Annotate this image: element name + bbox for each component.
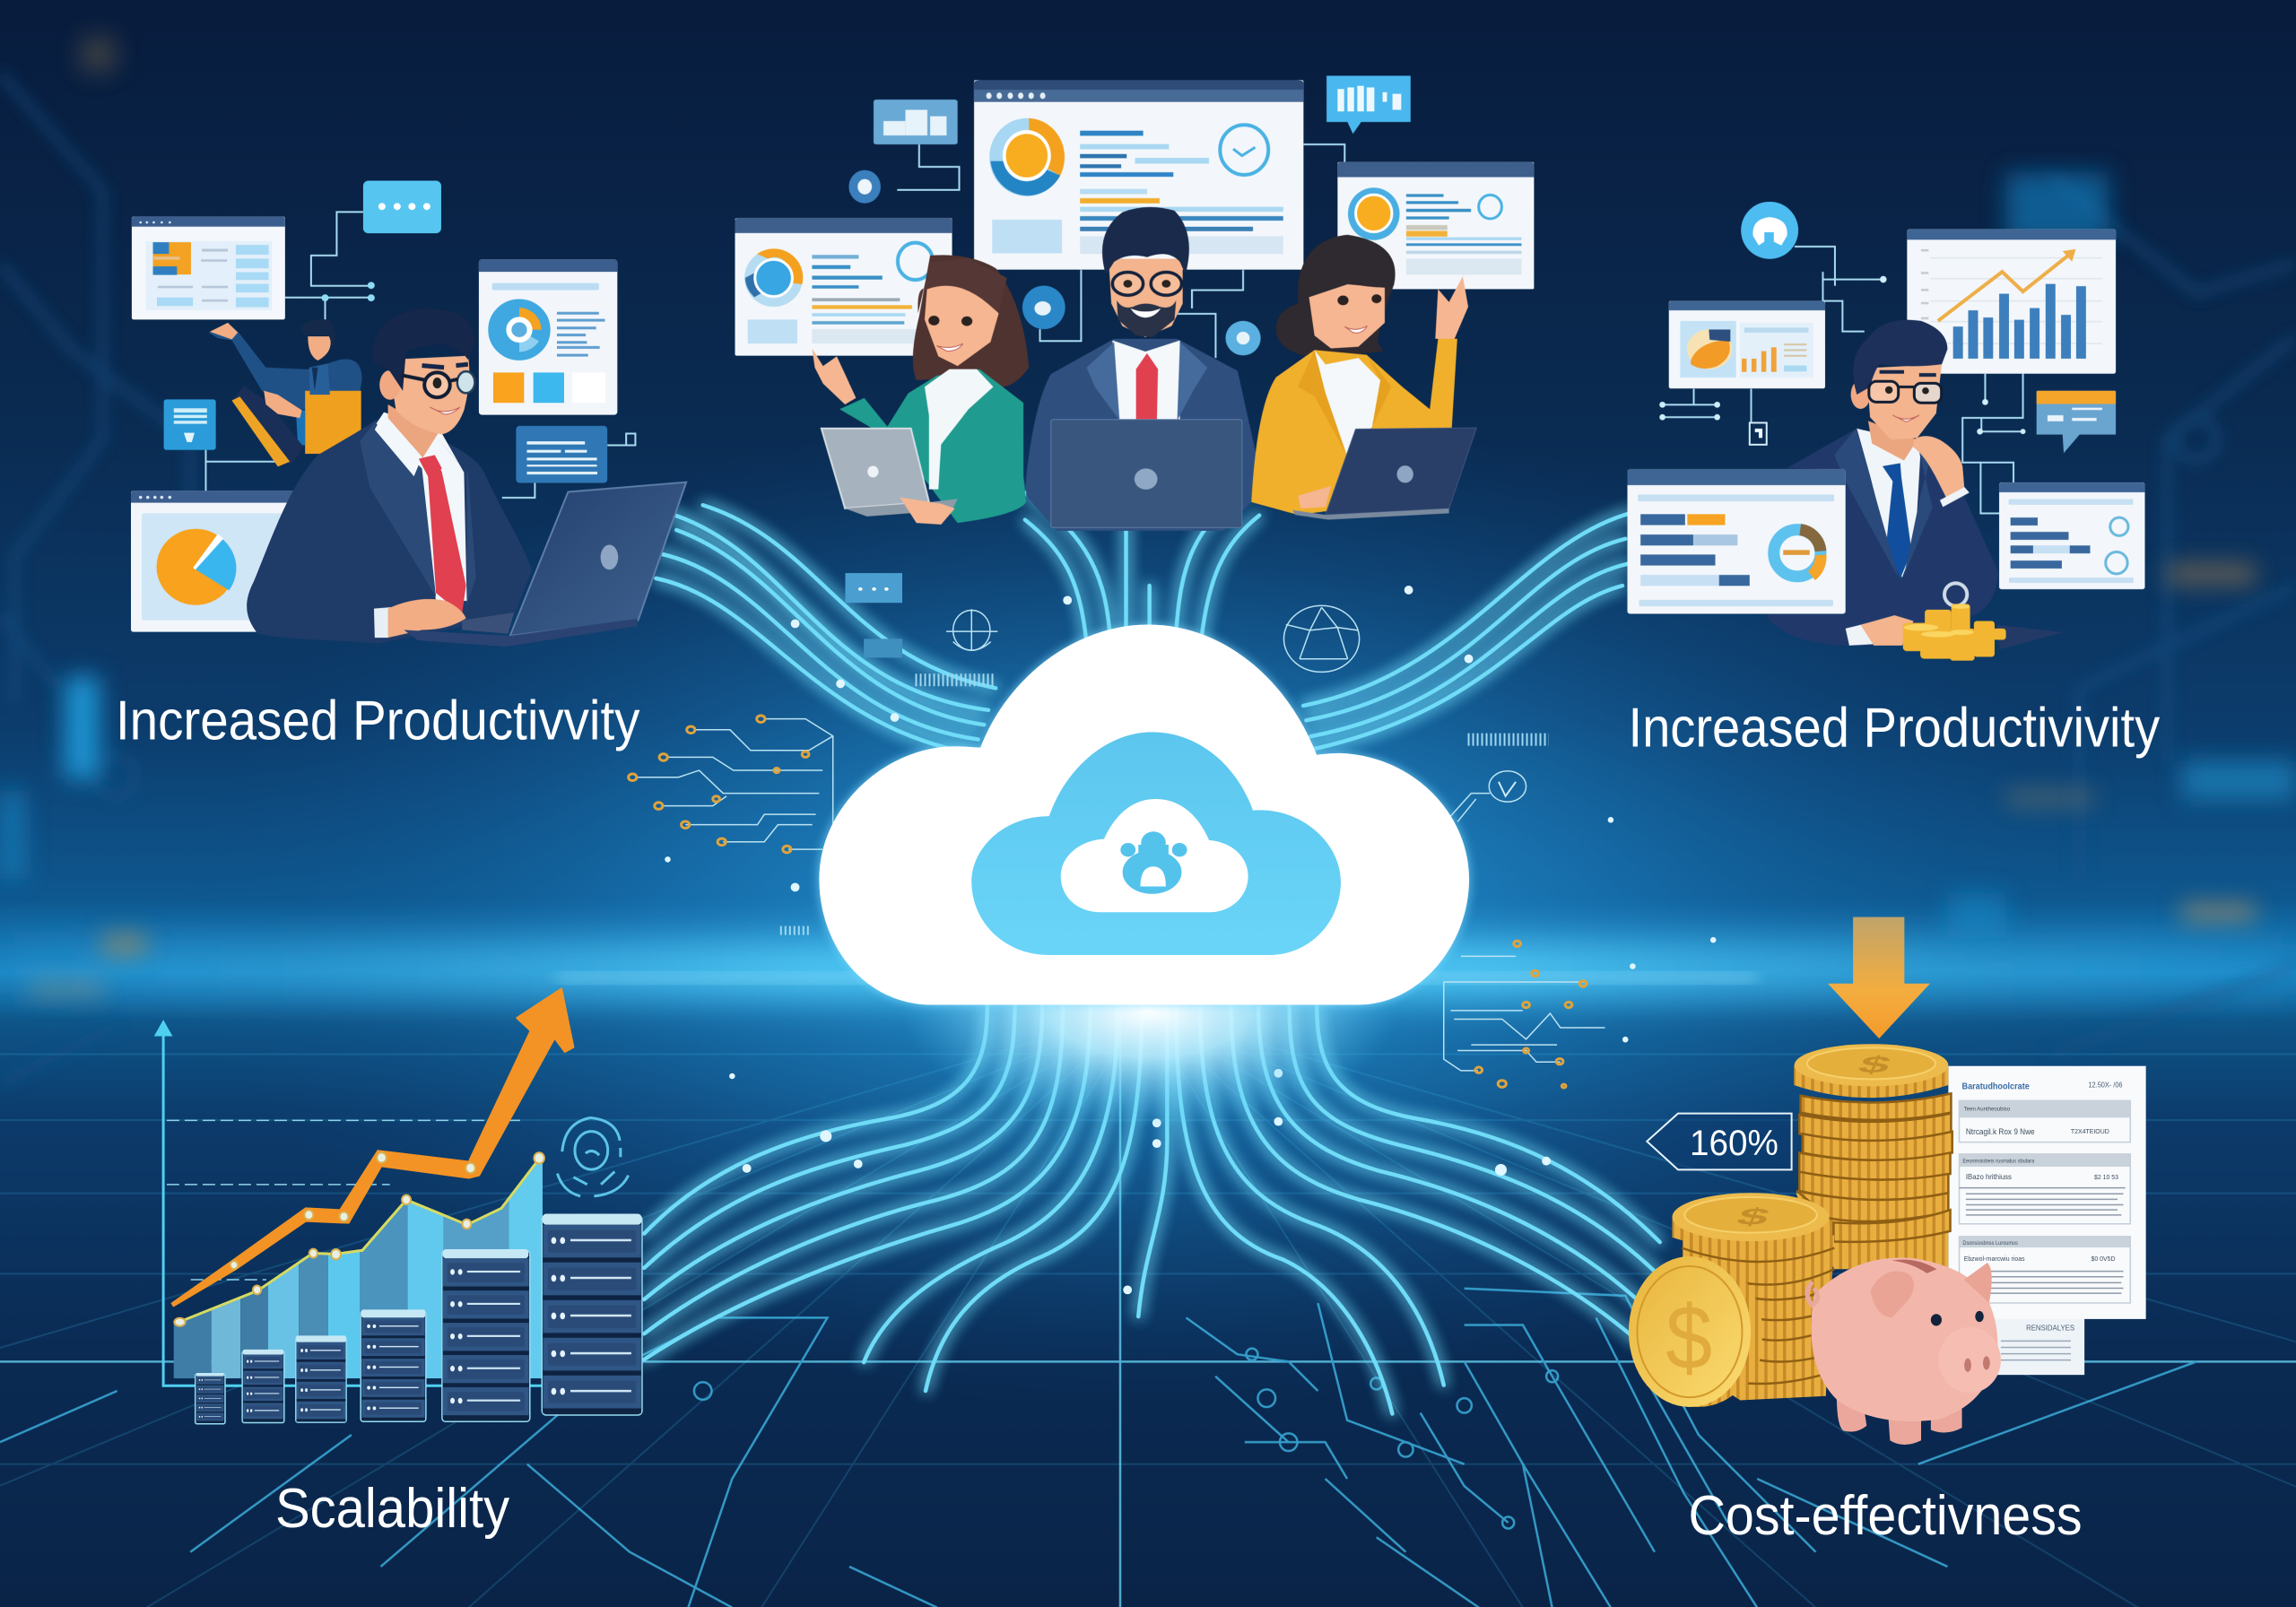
invoice: Teen Auntheoubiso — [1964, 1106, 2011, 1112]
coin pile — [1903, 583, 2006, 661]
small tech tiles — [845, 573, 902, 657]
wire globe left — [946, 609, 997, 650]
front coin — [1629, 1256, 1762, 1407]
top right flow — [1303, 512, 1632, 750]
small person presenting — [209, 319, 362, 466]
label: increased productivity right: Increased Productivivity — [1629, 698, 2160, 760]
percentage tag — [1647, 1114, 1792, 1169]
circuit right orange — [1444, 941, 1605, 1088]
back invoice — [1993, 1314, 2084, 1375]
window: report — [132, 216, 285, 319]
back invoice: RENSIDALYES — [2026, 1324, 2075, 1333]
panel: scalability — [154, 988, 642, 1424]
wire globe right — [1283, 605, 1360, 672]
circle icon right — [1450, 771, 1526, 821]
short coin stack — [1672, 1193, 1834, 1400]
window: right dashboard — [1337, 162, 1535, 289]
top left flow — [656, 505, 996, 754]
data flow lines — [644, 489, 1660, 1413]
man in blue suit — [1026, 207, 1259, 531]
woman in yellow — [1251, 235, 1476, 520]
icon badge — [1741, 202, 1798, 259]
label: increased productivity left: Increased Productivvity — [116, 690, 639, 751]
tech details around the cloud — [629, 573, 1605, 1088]
main person with laptop — [247, 308, 686, 647]
speech tile — [2037, 391, 2116, 453]
woman in teal — [812, 255, 1029, 525]
small tile — [164, 399, 216, 450]
top center flow — [1023, 489, 1259, 644]
tall coin stack — [1794, 1044, 1952, 1269]
percentage tag: 160% — [1690, 1124, 1779, 1163]
panel: top left productivity — [131, 181, 686, 647]
invoice: Ntrcagil.k Rox 9 Nwe — [1966, 1127, 2035, 1136]
window: pie — [131, 491, 323, 632]
panel: cost effectiveness — [1629, 917, 2146, 1445]
bottom flow — [644, 1005, 1660, 1413]
piggy bank — [1807, 1257, 2001, 1445]
short coin stack: $ — [1733, 1204, 1774, 1230]
server racks — [196, 1213, 642, 1424]
panel: top center team — [735, 75, 1535, 531]
invoice: $0 0V5D — [2091, 1254, 2116, 1263]
person thinking — [1766, 320, 2064, 649]
invoice: IBazo hrithiuss — [1966, 1173, 2012, 1181]
invoice: T2X4TEIOUD — [2071, 1127, 2109, 1135]
connector lines — [1659, 247, 2025, 513]
particles — [665, 586, 1716, 1294]
inner blue cloud — [971, 732, 1341, 955]
speech tile — [363, 181, 441, 233]
cloud core glyph — [1120, 831, 1187, 894]
invoice: $2 10 53 — [2094, 1173, 2118, 1181]
window: donut — [479, 259, 617, 415]
window: bars and donut — [1627, 469, 1846, 613]
glow under cloud — [900, 893, 1398, 1127]
monitoring icon — [557, 1118, 629, 1196]
perspective grid — [0, 1011, 2296, 1607]
invoice: Dsonsiosbnss Luroumus — [1962, 1241, 2018, 1247]
front coin: $ — [1665, 1286, 1712, 1388]
panel: top right productivity — [1627, 202, 2144, 661]
label: scalability: Scalability — [275, 1478, 509, 1540]
small tiles — [848, 75, 1411, 355]
window: right bars — [1999, 482, 2144, 589]
invoice: Eeonmsiobeis rusmalus sbulara — [1962, 1159, 2035, 1164]
inner white cloud — [1061, 799, 1248, 912]
invoice: 12.50X- /06 — [2088, 1081, 2123, 1089]
note tile — [516, 426, 607, 483]
circuit left orange — [629, 716, 833, 853]
barcodes — [780, 680, 1549, 931]
window: growth chart — [1907, 230, 2116, 374]
invoice — [1948, 1066, 2146, 1319]
central cloud icon — [819, 624, 1469, 1005]
window: pie and bars — [1669, 301, 1825, 388]
growth chart — [154, 987, 574, 1387]
window: left dashboard — [735, 218, 952, 356]
connector lines — [205, 212, 635, 498]
connector lines — [897, 144, 1344, 358]
window: main dashboard — [974, 80, 1303, 270]
tall coin stack: $ — [1854, 1052, 1895, 1078]
circuit board traces — [0, 1011, 2296, 1607]
invoice: Baratudhoolcrate — [1962, 1081, 2030, 1092]
invoice: Ebzwol-rnarcwiu rioas — [1964, 1254, 2025, 1263]
label: cost effectiveness: Cost-effectivness — [1688, 1485, 2083, 1547]
down arrow — [1828, 917, 1930, 1038]
